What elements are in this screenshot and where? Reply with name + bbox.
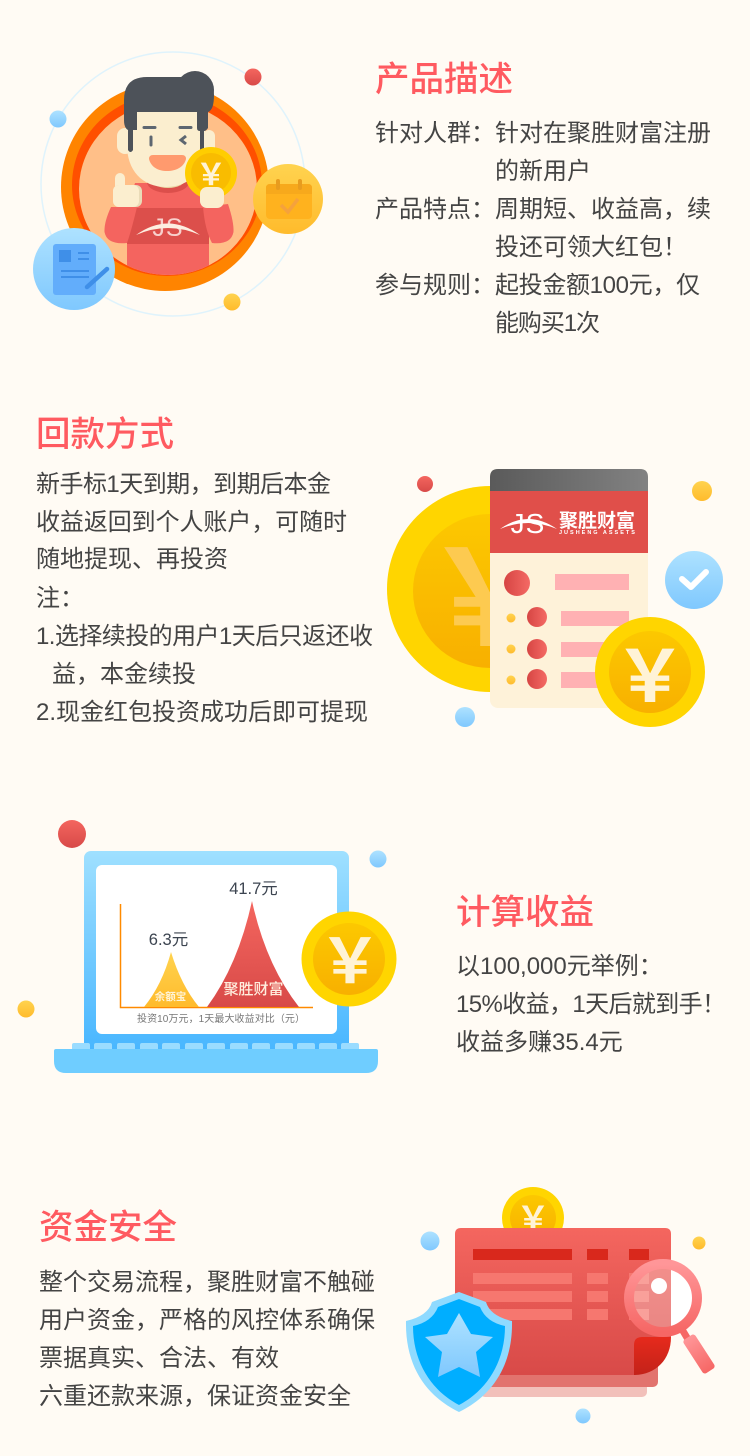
description text: 起投金额100元，仅: [495, 272, 700, 299]
heading: 资金安全: [39, 1209, 177, 1247]
safety text: [39, 1269, 375, 1410]
description text: 针对人群：: [375, 120, 495, 147]
repayment text: [36, 471, 373, 726]
top coin: [502, 1187, 564, 1228]
shirt logo: JS: [152, 214, 184, 242]
stacked document layers: [470, 1340, 658, 1397]
description text: 针对在聚胜财富注册: [495, 120, 711, 147]
coin: [302, 911, 396, 1006]
chart axes: [120, 904, 313, 1008]
coin: ￥: [319, 911, 381, 1001]
brand logo: 聚胜财富: [559, 509, 635, 532]
earnings peak chart: [120, 880, 313, 1025]
heading: 产品描述: [375, 61, 513, 99]
earnings text: [456, 953, 726, 1056]
safety text: 用户资金，严格的风控体系确保: [39, 1307, 375, 1334]
description text: 能购买1次: [495, 310, 600, 337]
top coin: ￥: [516, 1192, 550, 1240]
panel: calculate earnings: [456, 894, 726, 1056]
repayment text: 1.选择续投的用户1天后只返还收: [36, 623, 373, 650]
heading: 回款方式: [36, 416, 174, 454]
decorative dots: [50, 68, 262, 310]
panel: fund safety: [39, 1209, 375, 1410]
earnings text: 收益多赚35.4元: [456, 1029, 623, 1056]
small coin: [595, 617, 705, 727]
held coin: [185, 147, 237, 199]
card: [490, 469, 648, 708]
small coin: ￥: [614, 618, 686, 723]
decorative dots: [18, 820, 386, 1018]
peak: jusheng: [207, 901, 299, 1007]
heading: 计算收益: [456, 894, 594, 932]
decorative dots: [417, 476, 712, 727]
illustration: account card with coins: [387, 469, 723, 727]
repayment text: 2.现金红包投资成功后即可提现: [36, 699, 368, 726]
held coin: ￥: [196, 150, 226, 194]
repayment text: 收益返回到个人账户，可随时: [36, 509, 347, 536]
decorative dots: [420, 1232, 706, 1424]
earnings text: 以100,000元举例：: [456, 953, 663, 980]
chart labels: 41.7元: [229, 880, 278, 898]
icon: document and pen: [33, 228, 115, 310]
description text: 产品特点：: [375, 196, 495, 223]
description text: [375, 120, 711, 337]
chart labels: 6.3元: [149, 931, 188, 949]
large coin: [387, 486, 593, 692]
card rows: [504, 570, 629, 689]
description text: 参与规则：: [375, 272, 495, 299]
repayment text: 注：: [36, 585, 84, 612]
character body: [127, 182, 209, 275]
chart labels: 聚胜财富: [223, 980, 284, 998]
hair: [124, 71, 214, 152]
peak: yuebao: [144, 952, 199, 1007]
chart labels: [137, 880, 305, 1025]
magnifier: [629, 1264, 716, 1375]
brand logo: JUSHENG ASSETS: [559, 530, 637, 536]
shield: [406, 1292, 512, 1412]
laptop body: [54, 851, 378, 1073]
illustration: laptop with earnings chart: [18, 820, 396, 1073]
panel: repayment method: [36, 416, 373, 726]
description text: 周期短、收益高，续: [495, 196, 711, 223]
arms: [104, 204, 234, 243]
chart labels: 余额宝: [155, 990, 186, 1003]
description text: 投还可领大红包！: [495, 234, 687, 261]
icon: check badge: [665, 551, 723, 609]
safety text: 六重还款来源，保证资金安全: [39, 1383, 351, 1410]
illustration: person with coin: [33, 52, 323, 316]
brand logo: [500, 508, 637, 539]
earnings text: 15%收益，1天后就到手！: [456, 991, 726, 1018]
face features: [144, 128, 191, 171]
large coin: ￥: [423, 491, 557, 685]
illustration: document, shield and magnifier: [406, 1187, 716, 1424]
safety text: 整个交易流程，聚胜财富不触碰: [39, 1269, 375, 1296]
icon: calendar: [253, 164, 323, 234]
shirt logo: [136, 214, 200, 242]
brand logo: JS: [511, 508, 545, 539]
document: [455, 1228, 671, 1375]
panel: product description: [375, 61, 711, 337]
repayment text: 新手标1天到期，到期后本金: [36, 471, 331, 498]
description text: 的新用户: [495, 158, 591, 185]
repayment text: 随地提现、再投资: [36, 546, 228, 573]
chart labels: 投资10万元，1天最大收益对比（元）: [137, 1012, 305, 1025]
repayment text: 益，本金续投: [52, 661, 196, 688]
orbit ring: [41, 52, 305, 316]
orange disc: [61, 83, 269, 291]
safety text: 票据真实、合法、有效: [39, 1345, 279, 1372]
hands: [113, 173, 224, 208]
head: [117, 97, 215, 187]
